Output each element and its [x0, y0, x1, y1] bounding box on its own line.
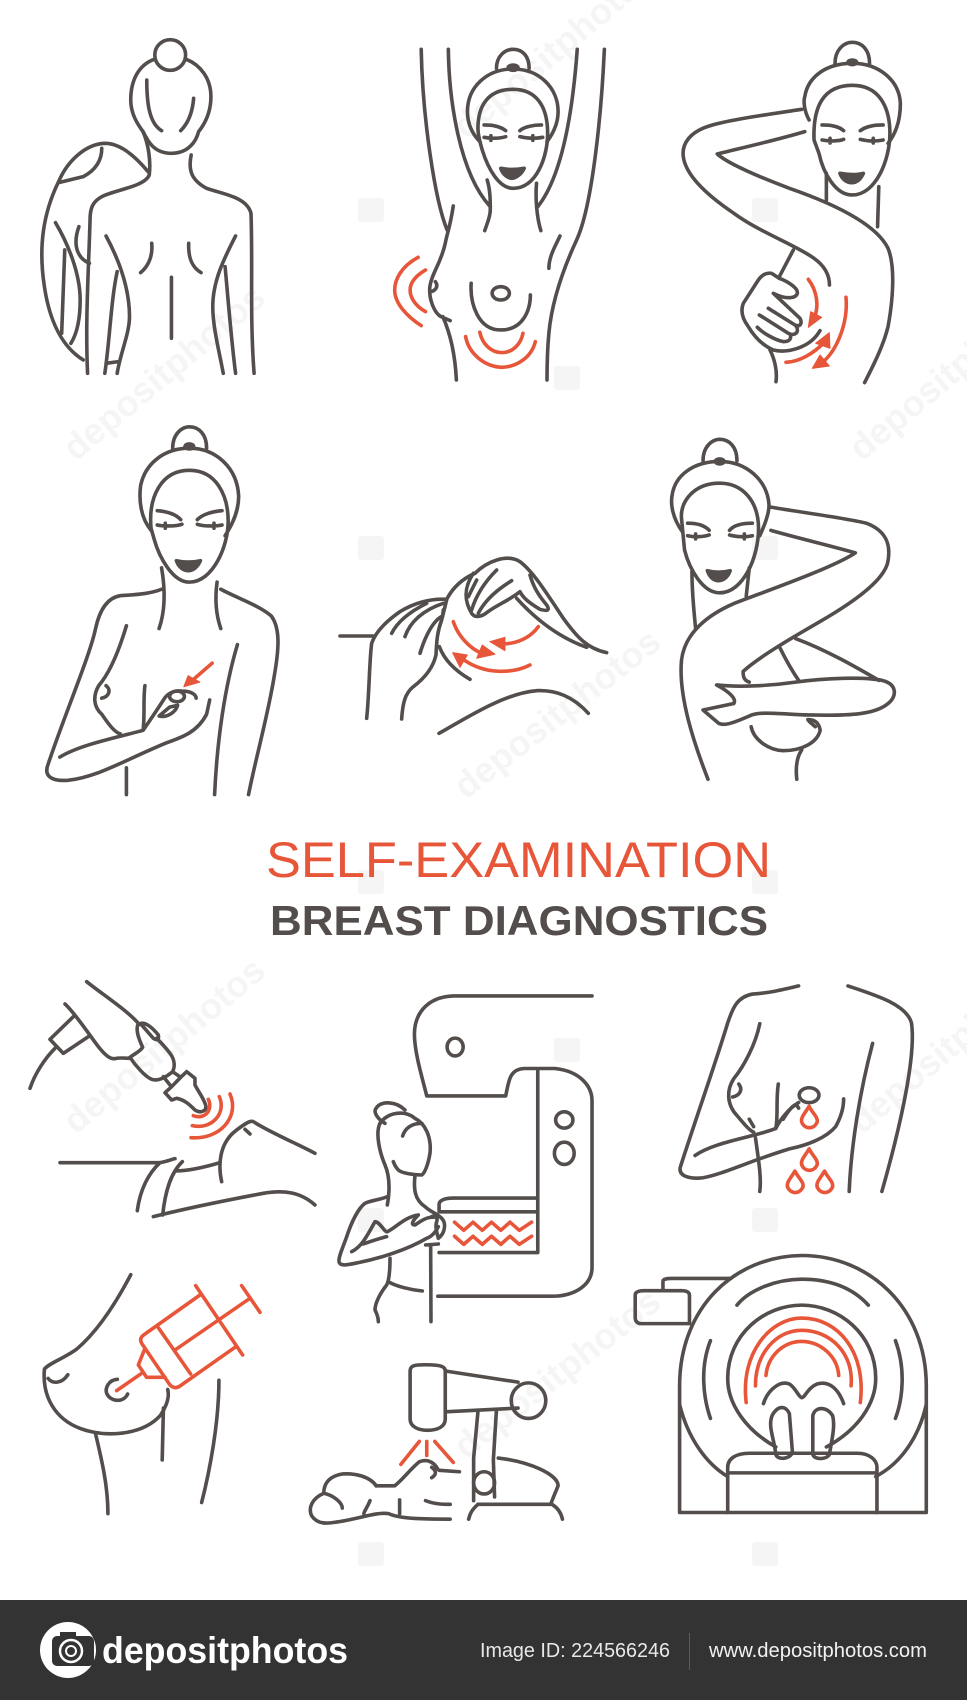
figure: mammography machine with patient — [339, 996, 592, 1322]
figure: lying-down palpation with hands — [340, 558, 607, 733]
icon: camera logo — [40, 1622, 96, 1678]
head and raised arm — [683, 42, 900, 383]
brand name: depositphotos — [102, 1630, 348, 1671]
figure: woman with raised arms — [395, 49, 604, 380]
watermark: depositphotos — [55, 949, 273, 1141]
heading: breast diagnostics: BREAST DIAGNOSTICS — [270, 897, 768, 944]
watermark: depositphotos — [446, 620, 668, 806]
watermark: depositphotos — [55, 276, 273, 468]
website url: www.depositphotos.com — [708, 1640, 927, 1662]
title — [266, 832, 771, 944]
syringe — [106, 1286, 260, 1400]
footer bar — [0, 1600, 967, 1700]
figure: woman from behind with hand on shoulder — [42, 40, 254, 373]
figure: woman with crossed arms — [672, 439, 894, 779]
breast outline — [44, 1275, 219, 1514]
figure: nipple discharge with drops — [680, 986, 912, 1193]
figure: ultrasound probe on breast — [30, 982, 315, 1217]
watermark: depositphotos — [446, 1280, 668, 1466]
figure: syringe injection into breast — [44, 1275, 260, 1514]
heading: self-examination: SELF-EXAMINATION — [266, 832, 771, 888]
patient — [339, 1103, 445, 1322]
figure: woman examining breast with arm behind head — [683, 42, 900, 383]
image id: Image ID: 224566246 — [480, 1640, 670, 1662]
figure: biopsy machine with lying patient — [310, 1365, 562, 1523]
figure: MRI scanner — [635, 1255, 926, 1512]
hand and arrows — [742, 250, 846, 382]
figure: woman pressing nipple — [47, 427, 278, 795]
machine — [414, 996, 592, 1296]
